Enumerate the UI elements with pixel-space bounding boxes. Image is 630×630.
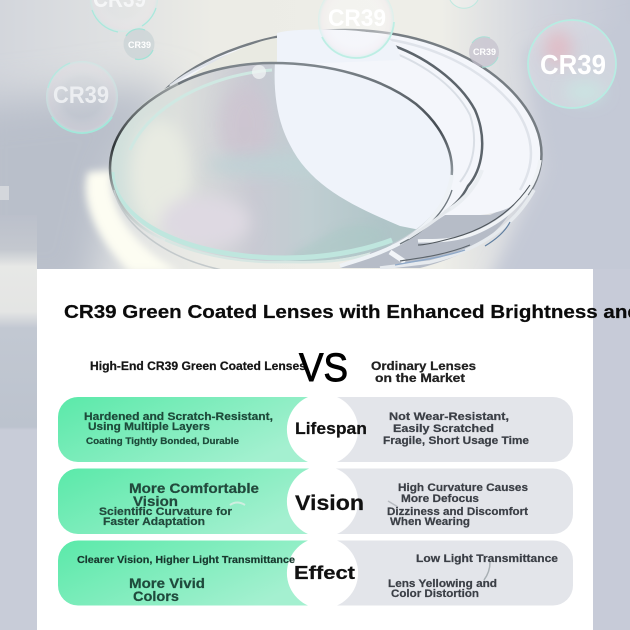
bubble: top center [318, 0, 394, 58]
Vision right text [387, 482, 528, 528]
Effect right text: Color Distortion [391, 588, 479, 600]
bubble: right large [528, 20, 616, 108]
Vision left text: Scientific Curvature for [99, 506, 233, 518]
bubble: small left: CR39 [128, 40, 151, 50]
front lens [112, 64, 416, 261]
under-lens shadow [340, 204, 515, 268]
bright reflection [274, 64, 451, 230]
bubble: top left large [90, 0, 158, 32]
VS mark: VS [299, 346, 348, 390]
Lifespan right text: Easily Scratched [393, 423, 494, 435]
bubble: tiny on lens [252, 65, 266, 79]
bubble: small right [469, 37, 499, 67]
rims: front lens [110, 63, 452, 270]
Vision right text: More Defocus [401, 493, 479, 505]
lens stack [110, 29, 542, 270]
right column heading: Ordinary Lenses [371, 361, 476, 373]
right column heading [371, 361, 476, 385]
bubble: small right: CR39 [473, 47, 496, 57]
title: CR39 Green Coated Lenses with Enhanced Brightness and [64, 301, 630, 322]
Vision right text: When Wearing [390, 516, 470, 528]
Lifespan left text: Coating Tightly Bonded, Durable [86, 436, 239, 446]
bubble: left large: CR39 [53, 82, 109, 109]
bubble: right large: CR39 [540, 49, 606, 80]
rims: lower right highlights [340, 160, 540, 268]
bubble: top right faint [448, 0, 480, 8]
Vision right text: Dizziness and Discomfort [387, 506, 528, 518]
Effect left text: Colors [133, 589, 179, 604]
Vision left text: Vision [133, 494, 178, 509]
Effect left text: Clearer Vision, Higher Light Transmittance [77, 554, 295, 566]
Vision left text [99, 481, 260, 528]
Vision right text: High Curvature Causes [398, 482, 528, 494]
Lifespan label: Lifespan [295, 419, 367, 438]
row: Vision [58, 466, 573, 537]
Effect left text [77, 554, 295, 604]
Lifespan left text: Using Multiple Layers [88, 421, 210, 433]
Effect right text: Lens Yellowing and [388, 578, 497, 590]
middle lens [396, 45, 484, 207]
row: Effect [58, 537, 573, 609]
Effect left text: More Vivid [129, 576, 205, 591]
Effect label: Effect [294, 562, 355, 583]
background photo [0, 0, 560, 428]
white comparison panel [37, 269, 630, 630]
Effect right text [388, 553, 558, 600]
top cap of the bright reflection [277, 30, 400, 56]
Lifespan right text: Not Wear-Resistant, [389, 411, 509, 423]
row: Lifespan [58, 394, 573, 465]
Lifespan right text [383, 411, 529, 447]
bubble: left large [46, 61, 118, 133]
Lifespan left text [84, 411, 273, 446]
bubble: small left [124, 28, 154, 60]
Vision label: Vision [295, 492, 364, 515]
gap between back rim and front lens [188, 38, 277, 78]
Vision left text: Faster Adaptation [103, 516, 205, 528]
bubble: top center: CR39 [328, 5, 386, 32]
Effect right text: Low Light Transmittance [416, 553, 558, 565]
left column heading: High-End CR39 Green Coated Lenses [90, 361, 306, 373]
Vision left text: More Comfortable [129, 481, 260, 496]
back lens [164, 28, 543, 222]
right column heading: on the Market [375, 373, 465, 385]
left strip [0, 215, 37, 430]
Lifespan left text: Hardened and Scratch-Resistant, [84, 411, 273, 423]
Lifespan right text: Fragile, Short Usage Time [383, 435, 529, 447]
